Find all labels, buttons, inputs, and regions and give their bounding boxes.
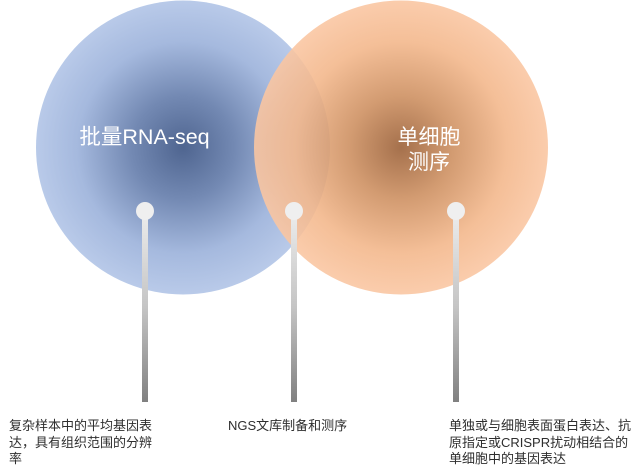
text: bulk description: 率 [9,451,22,466]
heading: single-cell sequencing [398,126,460,174]
circle: bulk RNA-seq [36,0,330,294]
pin: right [447,202,465,402]
text: single-cell description: 单独或与细胞表面蛋白表达、抗 [449,418,631,433]
pin: middle [285,202,303,402]
text: NGS description: NGS文库制备和测序 [228,418,347,433]
heading: single-cell sequencing: 单细胞 [398,126,460,149]
text: bulk description [9,418,152,466]
text: single-cell description: 原指定或CRISPR扰动相结合的 [449,434,628,450]
text: bulk description: 达，具有组织范围的分辨 [9,434,152,450]
text: single-cell description: 单细胞中的基因表达 [449,451,566,466]
heading: single-cell sequencing: 测序 [408,151,450,174]
text: bulk description: 复杂样本中的平均基因表 [9,418,152,433]
circle: single-cell sequencing [254,0,548,294]
heading: bulk RNA-seq: 批量RNA-seq [79,125,210,149]
pin: left [136,202,154,402]
text: single-cell description [449,418,631,466]
